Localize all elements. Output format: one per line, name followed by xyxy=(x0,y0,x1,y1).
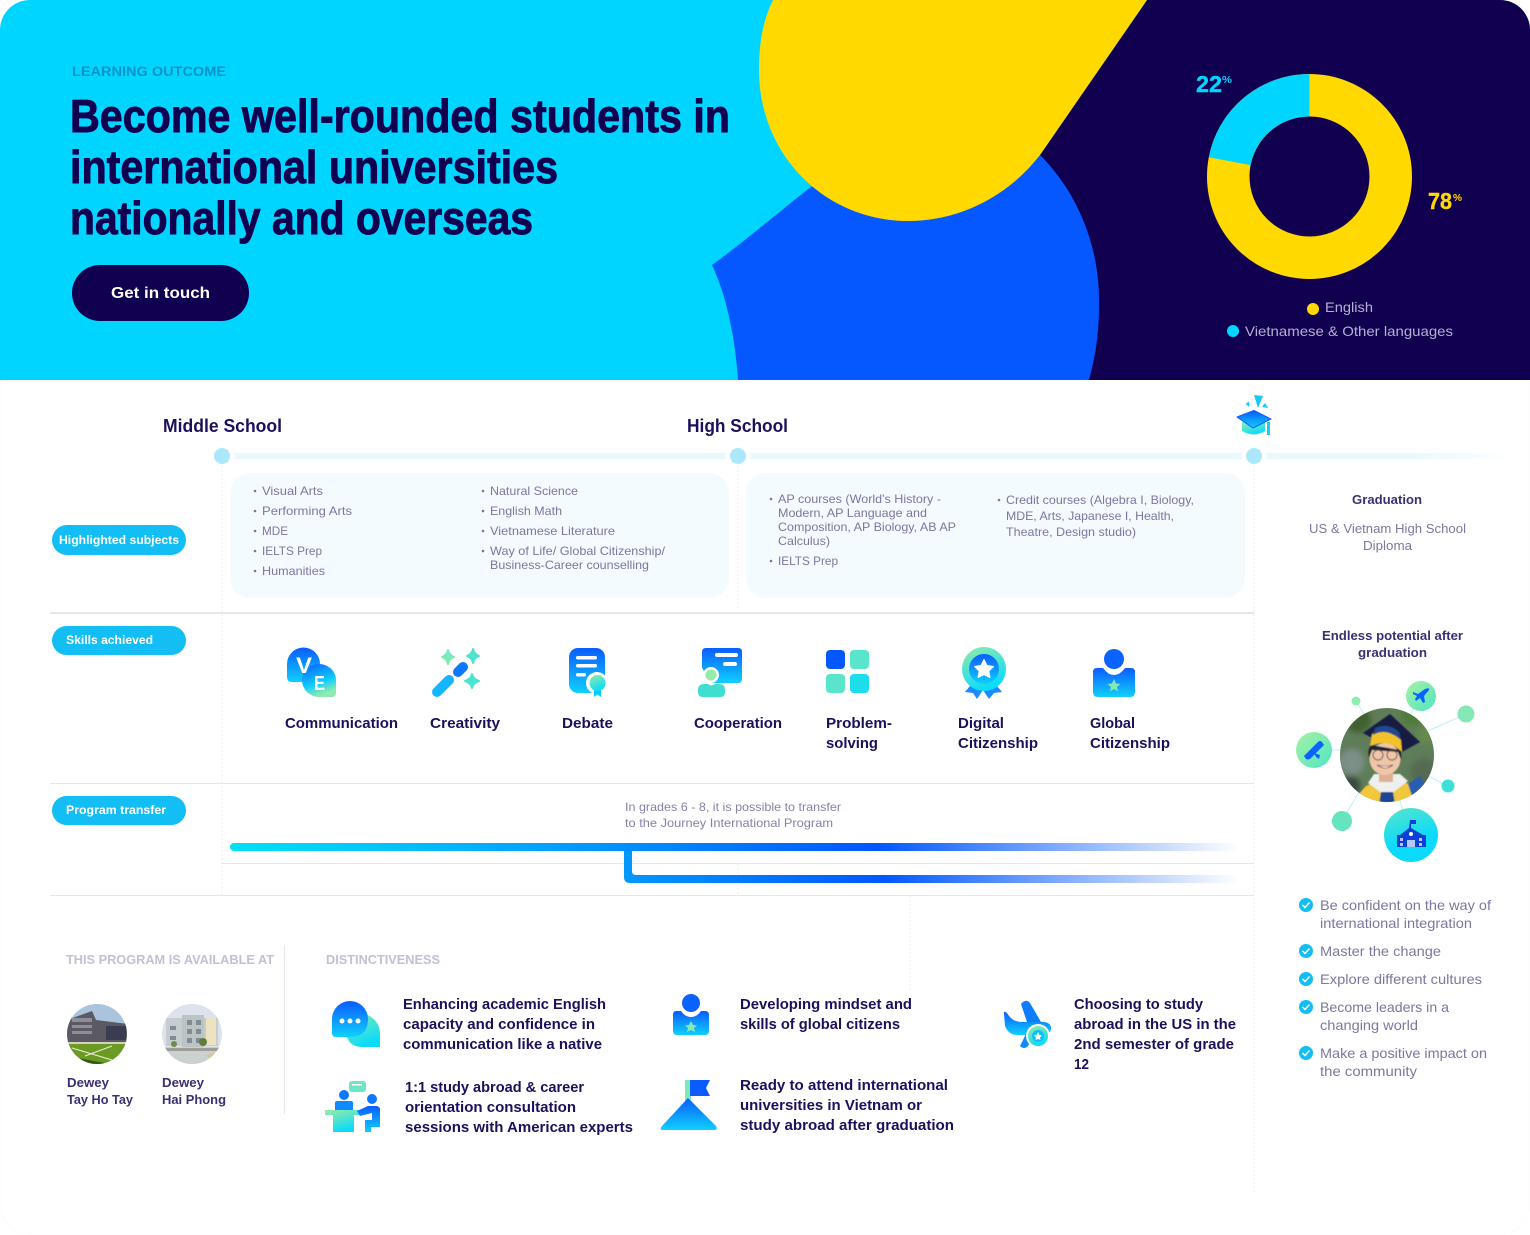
subject list, first column: Visual Arts xyxy=(262,484,323,498)
subject list, first column: Humanities xyxy=(262,564,325,578)
middle school heading: Middle School xyxy=(163,416,282,436)
pill: program transfer xyxy=(52,796,186,825)
outcomes checklist: changing world xyxy=(1320,1017,1418,1033)
pill: highlighted subjects: Highlighted subjects xyxy=(59,533,179,547)
skill: communication xyxy=(285,648,398,732)
distinctive: study abroad: Choosing to study xyxy=(1074,996,1204,1013)
satellite: plane xyxy=(1406,681,1436,711)
AP course list: Calculus) xyxy=(778,534,830,548)
skill: problem-solving: solving xyxy=(826,735,878,752)
campus availability: THIS PROGRAM IS AVAILABLE AT xyxy=(66,952,274,967)
AP course list xyxy=(770,492,956,568)
pill: skills achieved xyxy=(52,626,186,655)
dark navy background shape xyxy=(1040,0,1530,380)
campus names: Tay Ho Tay xyxy=(67,1092,134,1107)
campus availability xyxy=(66,952,274,1107)
student diagram xyxy=(1296,681,1474,862)
graduation block xyxy=(1309,492,1466,553)
skill: global citizenship: Citizenship xyxy=(1090,735,1170,752)
program transfer note xyxy=(625,800,841,830)
AP course list: AP courses (World's History - xyxy=(778,492,941,506)
distinctiveness heading: DISTINCTIVENESS xyxy=(326,952,440,967)
program transfer note: to the Journey International Program xyxy=(625,816,833,830)
skill: debate: Debate xyxy=(562,715,613,732)
icon: medal xyxy=(962,647,1006,699)
campus names: Hai Phong xyxy=(162,1092,226,1107)
icon: plane with badge xyxy=(1004,1001,1051,1048)
distinctive: academic english: capacity and confidence in xyxy=(403,1016,595,1033)
distinctive: study abroad: 12 xyxy=(1074,1056,1089,1073)
skill: creativity xyxy=(430,649,501,732)
check icons xyxy=(1299,898,1313,1060)
skill: problem-solving xyxy=(826,650,892,752)
outcomes checklist: Be confident on the way of xyxy=(1320,897,1491,913)
skill: digital citizenship xyxy=(958,647,1038,752)
satellite: diploma xyxy=(1296,732,1332,768)
outcomes checklist: Explore different cultures xyxy=(1320,971,1482,987)
photo: graduating student xyxy=(1338,706,1438,804)
icon: graduation cap xyxy=(1237,395,1271,435)
distinctive: academic english xyxy=(332,996,606,1053)
skill: cooperation xyxy=(694,648,782,732)
connector lines xyxy=(1314,696,1466,835)
distinctive: universities: Ready to attend international xyxy=(740,1077,948,1094)
subject list, first column: MDE xyxy=(262,524,288,538)
subject list, second column: Business-Career counselling xyxy=(490,558,649,572)
skill: global citizenship: Global xyxy=(1090,715,1135,732)
icon: chat bubbles xyxy=(332,1001,380,1047)
skill: creativity: Creativity xyxy=(430,715,501,732)
pill: program transfer: Program transfer xyxy=(66,803,166,817)
label 78%: 78 xyxy=(1428,188,1452,214)
distinctive: global citizens xyxy=(673,994,912,1035)
icon: magic wand xyxy=(437,649,479,692)
distinctive: consultation: orientation consultation xyxy=(405,1099,576,1116)
distinctive: academic english: communication like a native xyxy=(403,1036,602,1053)
photo: Dewey Hai Phong xyxy=(162,1004,222,1064)
credit course list: MDE, Arts, Japanese I, Health, xyxy=(1006,509,1174,523)
button: get in touch xyxy=(72,265,249,321)
subject list, second column: Vietnamese Literature xyxy=(490,524,615,538)
outcomes checklist xyxy=(1299,897,1491,1079)
program transfer note: In grades 6 - 8, it is possible to transfer xyxy=(625,800,841,814)
panel: middle school subjects xyxy=(230,473,729,598)
graduation block: Diploma xyxy=(1363,538,1413,553)
outcomes checklist: the community xyxy=(1320,1063,1417,1079)
subject list, first column: IELTS Prep xyxy=(262,544,322,558)
skill: debate xyxy=(562,648,613,732)
skill: communication: Communication xyxy=(285,715,398,732)
distinctive: global citizens: skills of global citizens xyxy=(740,1016,900,1033)
endless potential heading: graduation xyxy=(1358,645,1427,660)
legend: Vietnamese & Other languages xyxy=(1245,323,1453,339)
satellite: small dots xyxy=(1332,696,1474,831)
icon: person with star xyxy=(1093,649,1135,697)
distinctive: academic english: Enhancing academic English xyxy=(403,996,606,1013)
distinctive: study abroad: 2nd semester of grade xyxy=(1074,1036,1234,1053)
endless potential heading xyxy=(1322,628,1463,660)
subject list, second column xyxy=(482,484,666,572)
campus names xyxy=(67,1075,226,1107)
blue curved shape xyxy=(712,155,1099,380)
distinctive: consultation: 1:1 study abroad & career xyxy=(405,1079,584,1096)
panel: high school subjects xyxy=(746,473,1245,598)
icon: flag on mountain xyxy=(661,1080,717,1130)
legend xyxy=(1227,299,1453,339)
icon: four tiles xyxy=(826,650,869,693)
donut chart xyxy=(1209,74,1391,258)
main heading xyxy=(70,90,730,244)
main heading: nationally and overseas xyxy=(70,192,533,244)
label 22% xyxy=(1196,76,1232,92)
program transfer arrows xyxy=(230,843,1240,883)
distinctive: consultation xyxy=(325,1079,633,1136)
subject list, first column xyxy=(254,484,352,578)
hero banner xyxy=(0,0,1530,380)
distinctive: consultation: sessions with American experts xyxy=(405,1119,633,1136)
button: get in touch: Get in touch xyxy=(111,285,210,302)
eyebrow label: LEARNING OUTCOME xyxy=(72,63,226,79)
outcomes checklist: Become leaders in a xyxy=(1320,999,1449,1015)
distinctive: study abroad: abroad in the US in the xyxy=(1074,1016,1236,1033)
main heading: international universities xyxy=(70,141,558,193)
icon: certificate document xyxy=(569,648,608,697)
outcomes checklist: Make a positive impact on xyxy=(1320,1045,1487,1061)
AP course list: Modern, AP Language and xyxy=(778,506,927,520)
subject list, second column: English Math xyxy=(490,504,562,518)
timeline xyxy=(214,448,1515,464)
photo: Dewey Tay Ho Tay xyxy=(67,1004,128,1064)
credit course list: Theatre, Design studio) xyxy=(1006,525,1136,539)
subject list, second column: Way of Life/ Global Citizenship/ xyxy=(490,544,666,558)
skill: digital citizenship: Citizenship xyxy=(958,735,1038,752)
credit course list: Credit courses (Algebra I, Biology, xyxy=(1006,493,1194,507)
subject list, second column: Natural Science xyxy=(490,484,578,498)
distinctive: global citizens: Developing mindset and xyxy=(740,996,912,1013)
credit course list xyxy=(998,493,1194,539)
outcomes checklist: Master the change xyxy=(1320,943,1441,959)
yellow curved shape xyxy=(759,0,1147,221)
distinctive: universities xyxy=(661,1077,954,1134)
distinctive: universities: study abroad after graduation xyxy=(740,1117,954,1134)
legend: English xyxy=(1325,299,1373,315)
subject list, first column: Performing Arts xyxy=(262,504,352,518)
distinctive: universities: universities in Vietnam or xyxy=(740,1097,922,1114)
icon: language bubbles: E xyxy=(314,673,325,695)
skill: cooperation: Cooperation xyxy=(694,715,782,732)
main heading: Become well-rounded students in xyxy=(70,90,730,142)
satellite: school xyxy=(1384,808,1438,862)
icon: consultation desk xyxy=(325,1081,380,1132)
icon: person with star xyxy=(673,994,709,1035)
campus names: Dewey xyxy=(162,1075,205,1090)
AP course list: Composition, AP Biology, AB AP xyxy=(778,520,956,534)
skill: problem-solving: Problem- xyxy=(826,715,892,732)
AP course list: IELTS Prep xyxy=(778,554,838,568)
pill: highlighted subjects xyxy=(52,525,186,555)
label 78% xyxy=(1428,192,1462,210)
skill: digital citizenship: Digital xyxy=(958,715,1004,732)
skill: global citizenship xyxy=(1090,649,1170,752)
icon: person and board xyxy=(698,648,742,697)
graduation block: Graduation xyxy=(1352,492,1422,507)
campus names: Dewey xyxy=(67,1075,110,1090)
outcomes checklist: international integration xyxy=(1320,915,1472,931)
graduation block: US & Vietnam High School xyxy=(1309,521,1466,536)
label 22%: 22 xyxy=(1196,71,1222,97)
endless potential heading: Endless potential after xyxy=(1322,628,1463,643)
label 78%: % xyxy=(1453,193,1462,204)
label 22%: % xyxy=(1222,75,1232,86)
icon: language bubbles xyxy=(287,648,336,697)
high school heading: High School xyxy=(687,416,788,436)
pill: skills achieved: Skills achieved xyxy=(66,633,153,647)
icon: language bubbles: V xyxy=(296,653,312,678)
distinctive: study abroad xyxy=(1004,996,1236,1073)
